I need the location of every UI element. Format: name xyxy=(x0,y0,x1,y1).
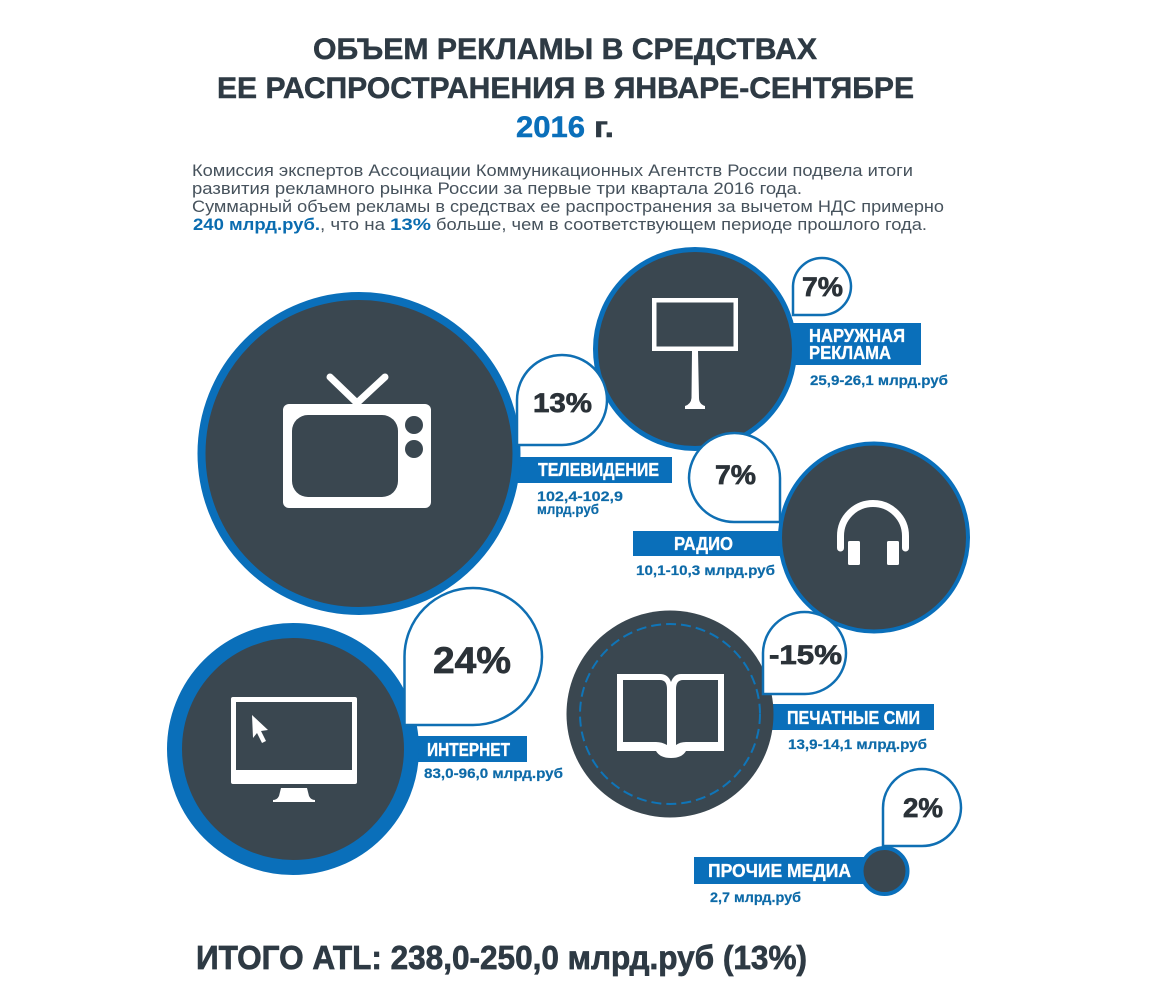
label: other media: ПРОЧИЕ МЕДИА xyxy=(708,860,851,881)
bubble: internet 24% xyxy=(404,588,542,725)
label bar: outdoor xyxy=(780,323,921,365)
intro text block: Комиссия экспертов Ассоциации Коммуникационных Агентств России подвела итоги xyxy=(192,161,913,180)
circle: print xyxy=(566,610,774,818)
circle: internet xyxy=(174,630,412,868)
title xyxy=(217,33,914,144)
label: other media xyxy=(708,860,851,905)
circle: radio xyxy=(780,444,968,632)
title: 2016 xyxy=(516,111,585,144)
label: television: 102,4-102,9 xyxy=(537,488,623,504)
intro text block: , что на xyxy=(320,215,386,234)
label: internet xyxy=(424,739,563,781)
circle: television xyxy=(202,296,516,611)
circle: outdoor xyxy=(596,250,794,448)
title: ОБЪЕМ РЕКЛАМЫ В СРЕДСТВАХ xyxy=(313,33,817,66)
bubble: outdoor 7%: 7% xyxy=(802,272,843,302)
circle: other media xyxy=(862,848,908,894)
intro text block: больше, чем в соответствующем периоде прошлого года. xyxy=(436,215,927,234)
bubble: other media 2% xyxy=(883,769,961,846)
bubble: internet 24%: 24% xyxy=(433,640,511,681)
label: television xyxy=(537,459,659,517)
label: print: ПЕЧАТНЫЕ СМИ xyxy=(787,707,920,728)
label: television: ТЕЛЕВИДЕНИЕ xyxy=(538,459,659,480)
label: outdoor xyxy=(809,325,948,388)
bubble: outdoor 7% xyxy=(793,258,851,315)
bubble: television 13%: 13% xyxy=(533,388,592,418)
label: radio: 10,1-10,3 млрд.руб xyxy=(636,562,775,578)
label: other media: 2,7 млрд.руб xyxy=(710,889,801,905)
label: print: 13,9-14,1 млрд.руб xyxy=(788,736,927,752)
icon: headphones xyxy=(840,504,906,565)
intro text block xyxy=(192,161,944,234)
label: television: млрд.руб xyxy=(537,501,599,517)
icon: monitor xyxy=(231,697,357,802)
bubble: television 13% xyxy=(517,355,607,445)
label: outdoor: 25,9-26,1 млрд.руб xyxy=(810,372,948,388)
icon: open book xyxy=(617,674,724,758)
bubble: print -15%: -15% xyxy=(769,640,842,670)
label: internet: ИНТЕРНЕТ xyxy=(427,739,511,760)
intro text block: 240 млрд.руб. xyxy=(193,215,320,234)
intro text block: развития рекламного рынка России за первые три квартала 2016 года. xyxy=(192,179,802,198)
label: print xyxy=(787,707,927,752)
label: radio: РАДИО xyxy=(674,533,733,554)
label: radio xyxy=(636,533,775,578)
icon: billboard xyxy=(654,300,736,409)
title: ЕЕ РАСПРОСТРАНЕНИЯ В ЯНВАРЕ-СЕНТЯБРЕ xyxy=(217,72,914,105)
label bar: print xyxy=(755,704,934,730)
label bar: radio xyxy=(633,531,793,556)
icon: television xyxy=(283,377,431,508)
bubble: radio 7% xyxy=(689,433,780,522)
bubble: radio 7%: 7% xyxy=(715,460,756,490)
bubble: print -15% xyxy=(763,612,846,694)
label: internet: 83,0-96,0 млрд.руб xyxy=(424,765,563,781)
title: г. xyxy=(594,111,614,144)
intro text block: Суммарный объем рекламы в средствах ее распространения за вычетом НДС примерно xyxy=(192,197,944,216)
dashed ring: print xyxy=(580,624,760,804)
label bar: internet xyxy=(400,736,527,762)
bubble: other media 2%: 2% xyxy=(903,793,943,823)
intro text block: 13% xyxy=(390,215,431,234)
label: outdoor: НАРУЖНАЯ xyxy=(809,325,905,346)
label bar: television xyxy=(500,457,672,483)
label: outdoor: РЕКЛАМА xyxy=(809,342,891,363)
label bar: other media xyxy=(694,857,874,884)
total: ИТОГО ATL: 238,0-250,0 млрд.руб (13%) xyxy=(196,939,807,976)
